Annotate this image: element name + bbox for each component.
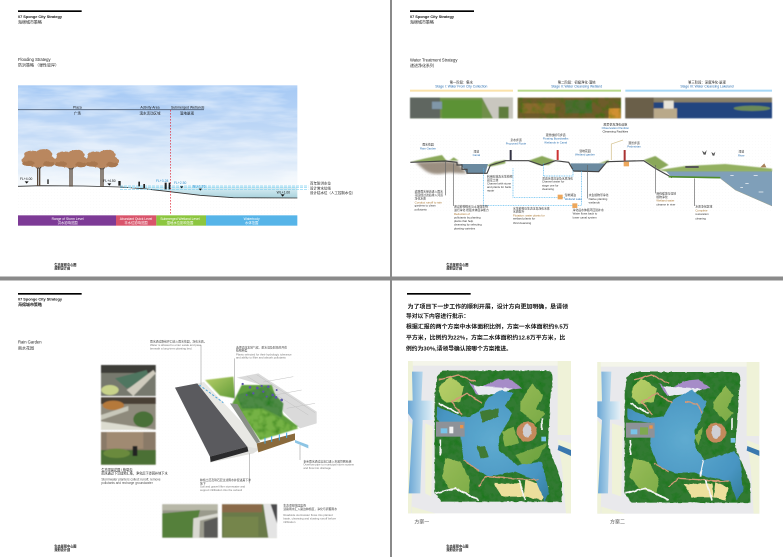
- top callout: 观景亭及净化设施: [603, 122, 627, 127]
- elevation markers: WL+1.00: [277, 190, 290, 194]
- section labels: Floating Boardwalks: [543, 137, 569, 141]
- heading: rain garden: 雨水花园: [18, 344, 34, 350]
- purple flowers: [241, 383, 283, 401]
- diagram notes: 种植土层及砾石层过滤雨水并促进其下渗: [200, 478, 251, 482]
- callout notes: lower canal system: [573, 215, 597, 219]
- panel: flooding strategy page: [18, 10, 355, 270]
- bottom photos: [162, 504, 277, 538]
- callout notes: cleansing: [542, 187, 554, 191]
- zone bar legend: [18, 215, 297, 226]
- page header: 07 Sponge City Strategy: [18, 15, 63, 19]
- section labels: River: [738, 153, 745, 157]
- section labels: 河道: [474, 149, 479, 153]
- footer: 生态景观中心图: [446, 544, 468, 549]
- heading: flooding strategy: [18, 57, 59, 68]
- callout notes: 净化后水体循环回流补水: [573, 208, 604, 212]
- photo caption: 生态滞留花园 / 植草沟: [101, 467, 132, 472]
- page header: [410, 10, 474, 24]
- scheme labels: 方案一: [414, 518, 429, 525]
- diagram notes: 地下: [200, 481, 206, 485]
- elevation markers: FL+4.50: [103, 179, 116, 183]
- top callout: Cleansing Facilities: [602, 130, 629, 134]
- diagram notes: 多余雨水通过溢流口进入市政管网系统: [303, 459, 352, 463]
- orange nodes: [558, 162, 629, 208]
- callout notes: Complete: [695, 208, 708, 212]
- stage headers: Stage II: Water Cleansing Wetland: [551, 85, 602, 89]
- elevation markers: [20, 177, 290, 197]
- leader lines: [201, 345, 300, 483]
- request text: 例约为30%,请领导确认按哪个方案推进。: [406, 344, 512, 352]
- diagram notes: Plants selected for their hydrologic tolerance: [236, 352, 292, 356]
- diagram notes: Overflow pipe to municipal storm system: [303, 463, 355, 467]
- callout notes: 水生植物与生态浮岛净化水体: [513, 206, 550, 210]
- panel: rain garden page: [18, 293, 355, 552]
- zone dimension line: [18, 106, 205, 115]
- water level notes: 百年防洪水位: [310, 180, 331, 185]
- zone bar legend: Waterbody: [244, 217, 260, 221]
- callout notes: 固定土壤: [487, 178, 498, 182]
- callout notes: 利用石笼及水生植物: [487, 175, 513, 179]
- elevation markers: FL+4.00: [20, 177, 32, 181]
- callout notes: Native planting: [589, 197, 608, 201]
- callout notes: Conduct runoff to rain: [415, 200, 442, 204]
- callout notes: cleansing by selecting: [454, 223, 482, 227]
- section labels: Wetland garden: [575, 153, 595, 157]
- section labels: Wetlands in Canal: [544, 140, 567, 144]
- water level lines: [120, 186, 308, 189]
- callout notes: Wetland water: [656, 199, 674, 203]
- panel: water treatment strategy page: [410, 10, 772, 270]
- trees: [22, 149, 119, 187]
- callout notes: 河道水体沉淀及水质净化: [542, 176, 573, 180]
- callout notes: plants that help: [454, 219, 474, 223]
- diagram notes: beneath a long-term planting bed.: [150, 346, 193, 350]
- footer: 规划设计部: [54, 265, 71, 270]
- zone bar legend: 洪水影响范围: [58, 220, 78, 225]
- section labels: 观景栈桥与步道: [546, 133, 566, 137]
- top callout: [602, 122, 629, 134]
- callout notes: 岸线缓坡与湿地: [656, 191, 676, 195]
- heading: flooding strategy: Flooding Strategy: [18, 57, 51, 62]
- heading: rain garden: Rain Garden: [18, 339, 42, 344]
- page header: 海绵城市策略: [18, 18, 42, 24]
- footer: [54, 262, 76, 270]
- people: [47, 179, 170, 189]
- diagram notes: Soil and gravel filter stormwater and: [200, 484, 246, 488]
- callout notes: pollutants: [415, 207, 427, 211]
- zone bar legend: 湿地水位影响范围: [167, 220, 194, 225]
- section labels: 亲水步道: [510, 138, 522, 142]
- stage headers: 第一阶段：集水: [450, 80, 474, 85]
- callout notes: and plants for bank: [487, 185, 512, 189]
- panel: scheme comparison page: [406, 293, 759, 552]
- callout notes: [415, 175, 712, 230]
- heading: flooding strategy: 防洪策略 （弹性驳岸）: [18, 62, 59, 68]
- zone dimension line: Plaza: [73, 106, 82, 110]
- callout notes: 水质提升: [513, 210, 524, 214]
- diagram notes: basin, cleansing and slowing runoff before: [283, 516, 337, 520]
- callout notes: 水质净化区域: [695, 205, 712, 209]
- callout notes: cleaning: [695, 216, 706, 220]
- callout notes: Channel water for: [542, 180, 564, 184]
- photo column: [101, 365, 156, 465]
- section labels: Proposed Route: [506, 142, 527, 146]
- water level notes: 设计常水位线: [310, 185, 331, 190]
- callout notes: 进行净化 增强水体自净能力: [454, 208, 489, 212]
- footer: 规划设计部: [54, 547, 71, 552]
- photo caption: [101, 467, 168, 485]
- diagram notes: 植物种类: [236, 349, 247, 353]
- zone bar legend: Abundant Quick Level: [120, 217, 153, 221]
- scheme labels: [414, 518, 625, 525]
- callout notes: Flotation: water plants for: [513, 213, 545, 217]
- footer: 规划设计部: [446, 547, 463, 552]
- callout notes: Water flows back to: [573, 212, 598, 216]
- section labels: Canal: [473, 153, 480, 157]
- photo caption: 雨水通过下沉绿地汇集，净化后下渗回补地下水: [101, 470, 168, 475]
- callout notes: planting varieties: [454, 226, 476, 230]
- callout notes: 植物净化: [656, 195, 668, 199]
- diagram notes: [150, 339, 355, 524]
- footer: 生态景观中心图: [446, 262, 468, 267]
- page header: [18, 293, 82, 307]
- request text: 平方米，比例约为22%，方案二水体面积约12.8万平方米，比: [406, 333, 566, 341]
- zone dimension line: Submerged Wetlands: [171, 106, 205, 110]
- heading: rain garden: [18, 339, 42, 350]
- footer: 规划设计部: [446, 265, 463, 270]
- photo caption: pollutants and recharge groundwater: [101, 481, 153, 485]
- stage headers: Stage I: Water From City Collection: [435, 85, 487, 89]
- page header: 海绵城市策略: [18, 301, 42, 307]
- footer: [446, 544, 468, 552]
- diagram notes: 雨水通过路缘开口流入雨水花园，净化水质。: [150, 339, 207, 343]
- section labels: Pedestrian: [627, 145, 641, 149]
- callout notes: cleanse in river: [656, 202, 675, 206]
- level labels: NL+1.70: [193, 185, 205, 189]
- diagram notes: Water is allowed to enter swale and pass: [150, 343, 202, 347]
- callout notes: wetland plants for: [513, 217, 535, 221]
- top rule: [407, 293, 471, 295]
- footer: [446, 262, 468, 270]
- request text: 导对以下内容进行批示：: [406, 312, 469, 320]
- zone bar legend: 丰水位影响范围: [124, 220, 148, 225]
- callout notes: 净化水质: [415, 196, 426, 200]
- diagram notes: 选择适应本地气候、耐水湿及耐旱的开花: [236, 345, 287, 349]
- level labels: FL+2.50: [174, 181, 186, 185]
- diagram notes: 生态滞留花园案例: [283, 503, 306, 507]
- section labels: 观景步道: [628, 141, 640, 145]
- page header: [18, 10, 82, 24]
- red dashed reference line: [170, 110, 172, 215]
- callout notes: repair: [487, 189, 494, 193]
- scheme labels: 方案二: [610, 518, 625, 525]
- stage headers: 第三阶段：深度净化·景观: [688, 80, 727, 85]
- zone bar legend: Range of Storm Level: [52, 217, 84, 221]
- heading: water treatment: 递进净化系列: [410, 62, 434, 68]
- callout notes: stage one for: [542, 183, 559, 187]
- callout notes: 湿地湖泊: [565, 193, 576, 197]
- callout notes: Channel with stone: [487, 182, 511, 186]
- footer: [54, 544, 76, 552]
- callout notes: gardens to clean: [415, 204, 436, 208]
- zone dimension line: 广场: [74, 110, 81, 115]
- waterway cross section: [410, 133, 772, 230]
- diagram notes: infiltration: [283, 520, 296, 524]
- callout notes: Wetland Lake: [565, 197, 582, 201]
- dotted flow lines: [483, 163, 581, 205]
- site plan: scheme two: [597, 362, 759, 514]
- heading: water treatment: [410, 57, 458, 68]
- callout notes: 通过植物根系与土壤微生物: [454, 204, 488, 208]
- diagram notes: and ability to filter and absorb pollutants: [236, 356, 286, 360]
- diagram notes: and flow into drainage: [303, 466, 331, 470]
- callout notes: pollutants by planting: [454, 215, 481, 219]
- site plan: scheme one: [408, 361, 571, 513]
- zone bar legend: 水体范围: [245, 220, 259, 225]
- top callout: Observation Pavilion: [602, 126, 629, 130]
- section labels: 雨水花园: [422, 143, 434, 147]
- zone dimension line: 滨水活动区域: [140, 110, 161, 115]
- section labels: [420, 133, 745, 157]
- zone bar legend: Submerged Wetland Level: [160, 217, 200, 221]
- footer: 生态景观中心图: [54, 262, 76, 267]
- callout notes: restoration: [695, 212, 709, 216]
- zone dimension line: Activity Area: [140, 106, 160, 110]
- heading: water treatment: Water Treatment Strategy: [410, 57, 458, 62]
- request text: 为了项目下一步工作的顺利开展，设计方向更加明确，恳请领: [408, 303, 568, 311]
- page header: 海绵城市策略: [410, 18, 434, 24]
- people and props: [510, 140, 766, 168]
- section chart: sky and bank profile: [18, 85, 308, 215]
- request text: [406, 303, 569, 352]
- page header: 07 Sponge City Strategy: [18, 298, 63, 302]
- callout notes: 水生植物带净化: [589, 193, 609, 197]
- callout notes: wetlands: [589, 201, 600, 205]
- leader lines: [446, 162, 695, 206]
- diagram notes: 道路雨水汇入路边种植区，净化与调蓄雨水: [283, 507, 337, 511]
- diagram notes: support infiltration into the subsoil: [200, 488, 242, 492]
- request text: 根据汇报的两个方案中水体面积比例，方案一水体面积约9.5万: [406, 323, 569, 331]
- level labels: FL+3.28: [156, 179, 168, 183]
- zone dimension line: 湿地景观: [180, 110, 194, 115]
- stage headers: Stage III: Water Cleansing Lakeland: [680, 85, 734, 89]
- footer: 生态景观中心图: [54, 544, 76, 549]
- callout notes: 花园经过滤后排入河道: [415, 193, 443, 197]
- stage headers: 第二阶段：初级净化·湿地: [558, 80, 596, 85]
- section labels: 湿地花园: [579, 149, 591, 153]
- level labels: [156, 179, 205, 189]
- page header: 07 Sponge City Strategy: [410, 15, 455, 19]
- callout notes: Reduction of: [454, 212, 470, 216]
- photo caption: Stormwater planters collect runoff, remove: [101, 478, 161, 482]
- water level notes: [310, 180, 355, 195]
- section labels: 河道: [739, 150, 744, 154]
- section labels: Rain Garden: [420, 146, 436, 150]
- isometric rain garden diagram: [175, 345, 317, 483]
- diagram notes: Roadside stormwater flows into planted: [283, 513, 333, 517]
- water level notes: 设计枯水位（人工控制水位）: [310, 190, 355, 195]
- stage headers: [410, 80, 772, 92]
- callout notes: third cleansing: [513, 221, 532, 225]
- callout notes: 道路雨水径流进入雨水: [415, 190, 443, 194]
- stage photos: [410, 98, 772, 118]
